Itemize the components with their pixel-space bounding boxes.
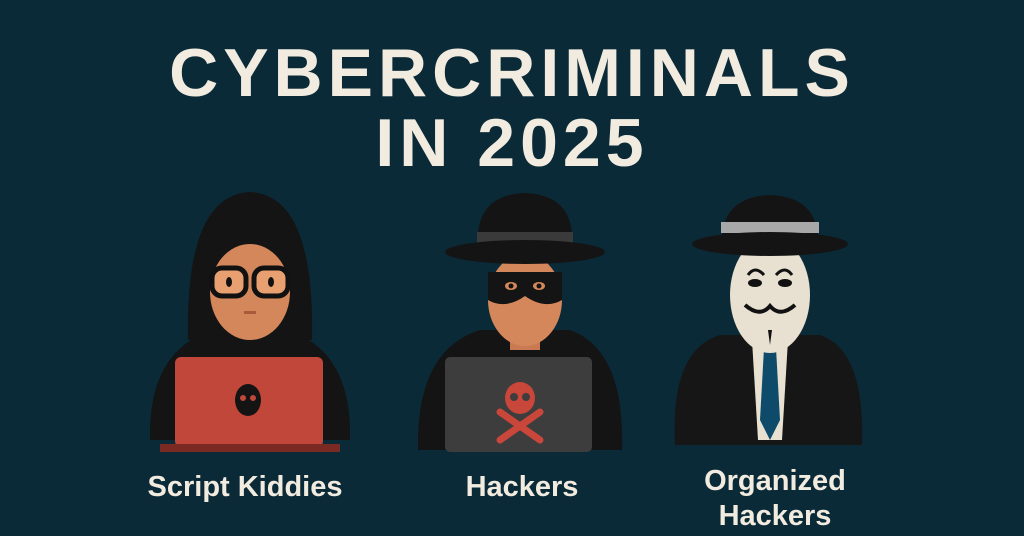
figure: hacker [418,193,622,452]
label: organized hackers [704,465,846,532]
label: hackers: Hackers [466,471,578,503]
title: CYBERCRIMINALS [169,35,855,111]
figure: organized hacker [675,195,862,445]
title: IN 2025 [375,105,649,181]
title [169,35,855,181]
label: script kiddies: Script Kiddies [148,471,342,503]
label: organized hackers: Hackers [719,500,831,532]
figure: script kiddie [150,192,350,452]
label: organized hackers: Organized [704,465,846,497]
